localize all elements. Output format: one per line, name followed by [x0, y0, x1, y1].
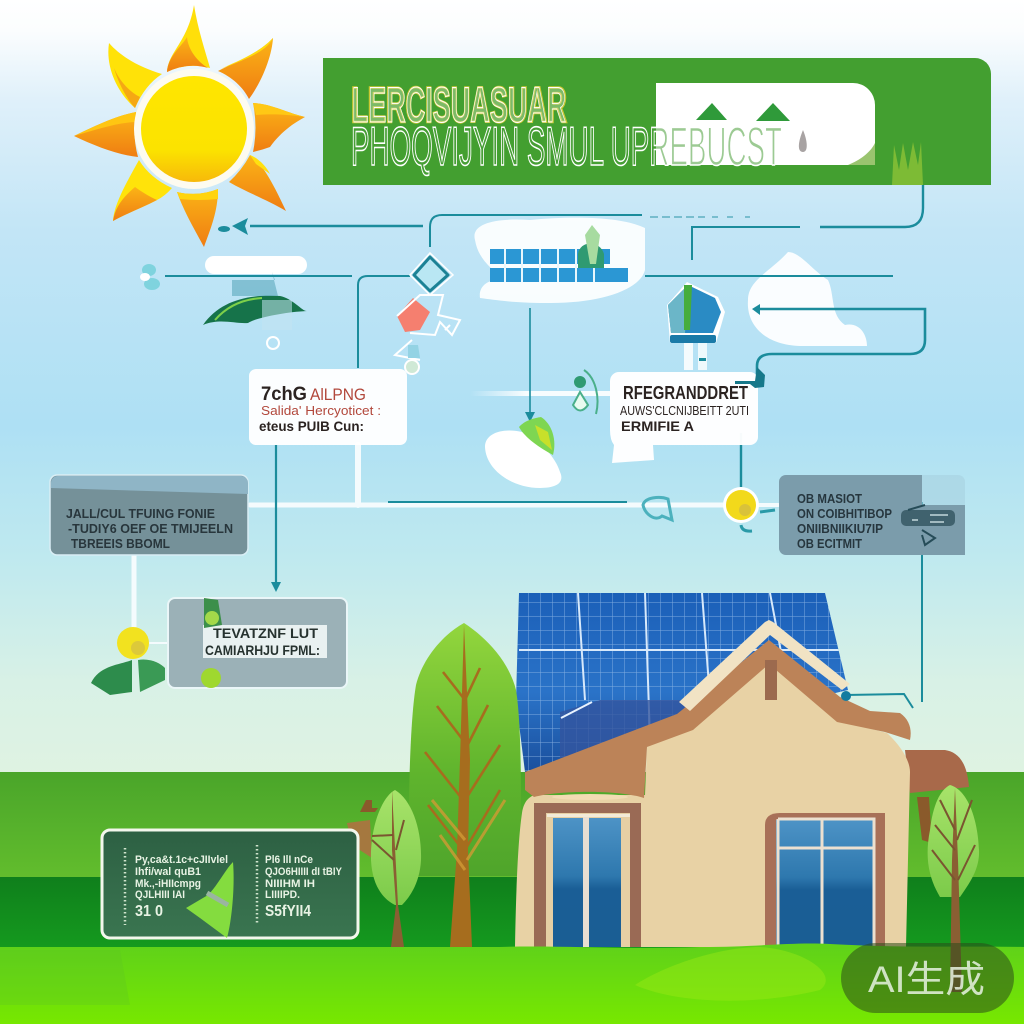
icon: blue solar panels — [490, 225, 628, 282]
icon: green sprout — [573, 370, 598, 414]
house: left window — [534, 803, 641, 947]
text strip — [203, 625, 327, 658]
icon: butterfly — [140, 264, 160, 290]
cloud with leaf: centre — [485, 417, 561, 488]
info box: grey second — [168, 598, 347, 688]
text box: right — [610, 367, 765, 463]
house — [515, 620, 969, 947]
text: heading: RFEGRANDDRET — [623, 383, 748, 403]
text: left column: Ihfi/wal quB1 — [135, 866, 201, 878]
icon: grass tuft — [892, 142, 923, 185]
text: right column: S5fYII4 — [265, 903, 311, 920]
text box: left: AlLPNG — [310, 385, 366, 404]
house: arch highlight — [552, 794, 628, 800]
text: left column: Py,ca&t.1c+cJIIvlel — [135, 854, 228, 866]
green ground bands — [0, 772, 1024, 949]
info box: grey right: OB ECITMIT — [797, 536, 862, 551]
icon: teal connector — [643, 497, 672, 520]
icon: green leaf — [519, 417, 554, 455]
title banner: LERCISUASUAR — [352, 77, 566, 133]
house: cream fascia — [679, 620, 850, 711]
title banner — [323, 58, 991, 185]
arrow: to sun — [218, 218, 248, 235]
icon: connector knot — [735, 367, 765, 388]
text: heading: 7chG — [261, 384, 307, 405]
text: right column — [265, 854, 343, 920]
lawn highlights — [0, 947, 826, 1005]
tree: small left — [347, 790, 421, 947]
text: body: eteus PUIB Cun: — [259, 418, 364, 434]
title line 1: LERCISUASUAR — [351, 77, 567, 133]
icon: green cone — [186, 862, 234, 938]
watermark badge — [841, 943, 1014, 1013]
icon: solar panel on roof — [515, 593, 850, 773]
text: left column: 31 0 — [135, 903, 163, 920]
info box: grey right: ONIIBNIIKIU7IP — [797, 521, 883, 536]
icon: grey drop — [799, 130, 807, 152]
text: left column: Mk.,-iHIIcmpg — [135, 878, 201, 890]
cloud: solar array — [474, 218, 645, 303]
house: right wing roof — [905, 750, 969, 793]
text: right column: Pl6 IlI nCe — [265, 854, 313, 866]
text box: left — [249, 369, 407, 445]
icon: green leaf with mist — [203, 272, 307, 330]
info box: grey left — [50, 475, 248, 555]
text: right column: LIIIIPD. — [265, 889, 300, 901]
text: body: ERMIFIE A — [621, 418, 694, 434]
text: subheading: Salida' Hercyoticet : — [261, 403, 381, 418]
connector dot and line — [841, 691, 913, 708]
sky background — [0, 0, 1024, 775]
house: walls — [515, 660, 910, 947]
text: left column: QJLHIII IAI — [135, 889, 185, 901]
watermark badge: AI生成 — [868, 959, 985, 1000]
info box: grey right: ON COIBHITIBOP — [797, 506, 892, 521]
teal connector lines — [165, 185, 925, 702]
text: description: OB MASIOT — [797, 491, 862, 506]
text: description: JALL/CUL TFUING FONIE — [66, 506, 215, 521]
icon: green clusters — [201, 598, 222, 688]
cloud with leaf: left — [203, 256, 307, 349]
info box: grey second: CAMIARHJU FPML: — [205, 642, 320, 658]
icon: yellow bulb left — [91, 627, 165, 695]
white title plate — [656, 83, 875, 165]
bright lawn — [0, 944, 1024, 1024]
icon: blue hexagon on stand — [667, 282, 725, 370]
icon: green triangles — [696, 103, 790, 121]
info box: grey left: TBREEIS BBOML — [71, 536, 170, 551]
panel: dark green info board — [102, 830, 358, 938]
arrowheads — [271, 304, 760, 592]
white connector lines — [134, 391, 778, 643]
text: left column — [135, 854, 228, 920]
decorative text strips — [125, 845, 257, 925]
icon: diamond — [410, 253, 453, 295]
text: right column: NIIIHM IH — [265, 878, 315, 890]
icon: dark glyph badge — [901, 505, 955, 545]
icon: red gem with white sketch — [395, 295, 460, 374]
house: right window — [765, 813, 885, 947]
house: gable post — [765, 660, 777, 700]
tree: small right — [917, 785, 979, 992]
tree: large — [409, 623, 521, 947]
icon: yellow junction — [723, 487, 775, 531]
text: description: TEVATZNF LUT — [213, 625, 318, 641]
info box: grey right — [779, 475, 965, 555]
icon: small ring — [267, 337, 279, 349]
cloud: right — [748, 252, 867, 346]
info box: grey left: -TUDIY6 OEF OE TMIJEELN — [68, 521, 233, 536]
icon: sun — [74, 5, 305, 247]
text: subheading: AUWS'CLCNIJBEITT 2UTI — [620, 403, 749, 418]
house: roof — [525, 640, 911, 798]
text: right column: QJO6HIIII dI tBIY — [265, 866, 343, 878]
